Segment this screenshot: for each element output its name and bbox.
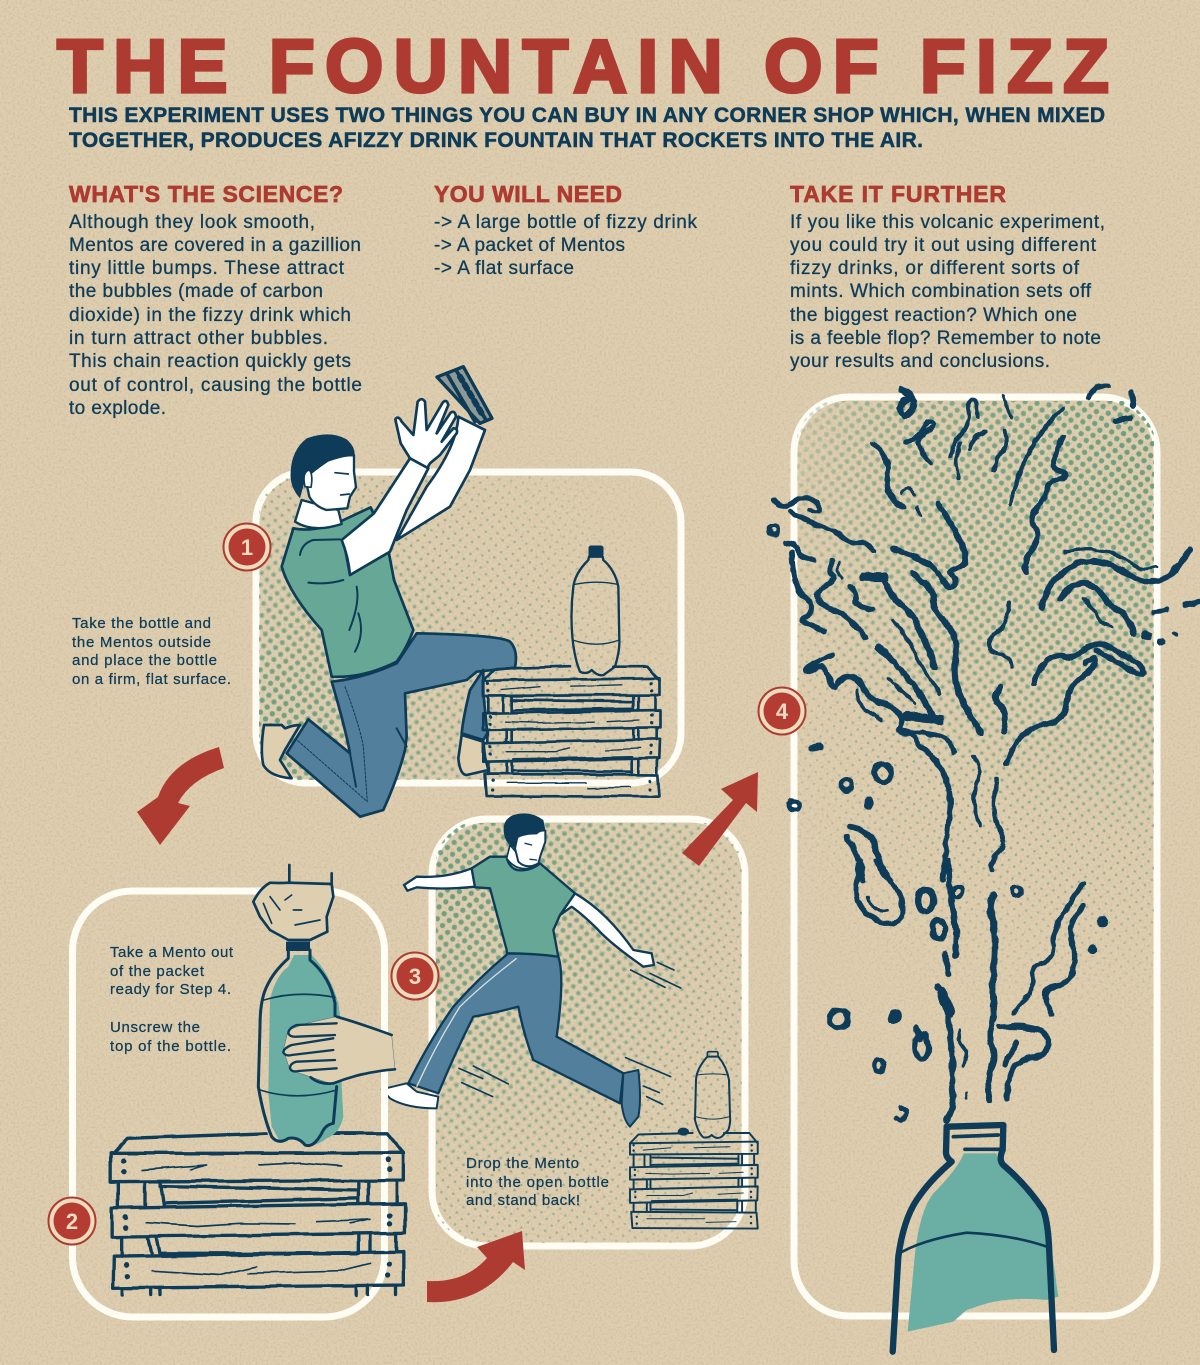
badge 2 [48, 1198, 96, 1244]
bottle liquid [908, 1153, 1058, 1332]
near arm [342, 458, 428, 575]
panel 2: bottle held by hands [253, 865, 395, 1146]
face [305, 455, 356, 510]
column: what's the science [69, 181, 362, 419]
panel 1: frame and halftone [256, 472, 681, 783]
panel 3: running man [382, 813, 681, 1127]
t-shirt [472, 857, 575, 957]
step 2 text: of the packet [110, 963, 205, 980]
neck [507, 845, 538, 869]
step 1 text: and place the bottle [72, 652, 217, 669]
trousers [408, 953, 623, 1103]
arms [404, 868, 475, 891]
badge 1: 1 [241, 535, 253, 560]
step 1 text: the Mentos outside [72, 634, 211, 651]
badge 3: 3 [409, 964, 421, 989]
arrow: step 1 to 2 [137, 747, 224, 845]
column: what's the science: This chain reaction quickly gets [69, 351, 351, 372]
column: what's the science: in turn attract other bubbles. [69, 328, 328, 349]
bottle outline [893, 1125, 1054, 1352]
column: you will need [434, 181, 698, 279]
column: take it further: fizzy drinks, or different sorts of [790, 258, 1080, 279]
step 3 text: and stand back! [466, 1192, 580, 1209]
step 2 text: Take a Mento out [110, 944, 234, 961]
column: what's the science: WHAT'S THE SCIENCE? [69, 181, 343, 207]
arrow: step 2 to 3 [427, 1231, 525, 1302]
panel 3: frame and halftone [432, 819, 745, 1246]
column: you will need: -> A packet of Mentos [434, 235, 625, 256]
column: take it further: If you like this volcanic experiment, [790, 212, 1105, 233]
column: take it further: your results and conclusions. [790, 351, 1050, 372]
bottle outline [258, 950, 337, 1146]
column: what's the science: to explode. [69, 398, 166, 419]
step 1 text [72, 615, 231, 688]
arrow: step 3 to 4 [682, 772, 758, 866]
lower spray strokes [830, 860, 1106, 1120]
front lower leg [462, 670, 487, 740]
panel 1: bottle [571, 546, 619, 675]
step 2 text [110, 944, 234, 1055]
step 2 text: Unscrew the [110, 1019, 200, 1036]
open hand [363, 399, 457, 547]
column: what's the science: Mentos are covered in a gazillion [69, 235, 361, 256]
column: what's the science: tiny little bumps. These attract [69, 258, 345, 279]
panel 2: large crate [111, 1133, 405, 1295]
intro text [69, 104, 1105, 152]
badge 3 [392, 952, 438, 1000]
step 2 text: ready for Step 4. [110, 981, 231, 998]
bottle fill [268, 955, 343, 1146]
step 2 text: top of the bottle. [110, 1038, 231, 1055]
column: what's the science: out of control, causing the bottle [69, 375, 362, 396]
panel 2: frame [72, 891, 384, 1317]
far arm [397, 417, 485, 540]
face [515, 831, 545, 866]
column: what's the science: dioxide) in the fizzy drink which [69, 305, 351, 326]
ear [304, 470, 312, 487]
shoes [382, 1083, 438, 1108]
panel 1: kneeling man [262, 367, 516, 817]
step 3 text [466, 1155, 609, 1209]
lower hand [283, 1017, 395, 1084]
badge 4: 4 [776, 699, 789, 724]
column: you will need: -> A flat surface [434, 258, 574, 279]
column: what's the science: Although they look smooth, [69, 212, 315, 233]
panel 4: fountain frame [794, 397, 1157, 1316]
intro text: THIS EXPERIMENT USES TWO THINGS YOU CAN BUY IN ANY CORNER SHOP WHICH, WHEN MIXED [69, 104, 1105, 127]
upper hand [253, 883, 333, 940]
column: take it further: the biggest reaction? Which one [790, 305, 1077, 326]
title: THE FOUNTAIN OF FIZZ [57, 24, 1109, 108]
column: you will need: YOU WILL NEED [434, 181, 622, 207]
hair [504, 813, 545, 848]
bottle and lower spray [830, 860, 1106, 1352]
back shoe [262, 725, 300, 778]
mentos packet [437, 367, 492, 423]
step 3 text: into the open bottle [466, 1174, 609, 1191]
column: take it further: is a feeble flop? Remember to note [790, 328, 1101, 349]
neck [295, 500, 342, 528]
step 1 text: Take the bottle and [72, 615, 211, 632]
motion lines [459, 962, 681, 1104]
step 1 text: on a firm, flat surface. [72, 671, 231, 688]
t-shirt [282, 507, 413, 677]
jeans [287, 633, 516, 817]
step 3 text: Drop the Mento [466, 1155, 579, 1172]
intro text: TOGETHER, PRODUCES AFIZZY DRINK FOUNTAIN THAT ROCKETS INTO THE AIR. [69, 129, 923, 152]
badge 4 [758, 688, 806, 734]
panel 1: crate [483, 667, 660, 797]
hair [291, 434, 355, 498]
column: take it further: mints. Which combination sets off [790, 281, 1092, 302]
panel 3: crate [630, 1133, 758, 1229]
fountain spray [769, 385, 1198, 880]
panel 3: small bottle [679, 1052, 730, 1138]
badge 2: 2 [66, 1209, 78, 1234]
column: take it further [790, 181, 1105, 372]
badge 1 [224, 524, 270, 570]
column: take it further: TAKE IT FURTHER [790, 181, 1006, 207]
column: you will need: -> A large bottle of fizzy drink [434, 212, 698, 233]
column: take it further: you could try it out using different [790, 235, 1097, 256]
column: what's the science: the bubbles (made of carbon [69, 281, 323, 302]
